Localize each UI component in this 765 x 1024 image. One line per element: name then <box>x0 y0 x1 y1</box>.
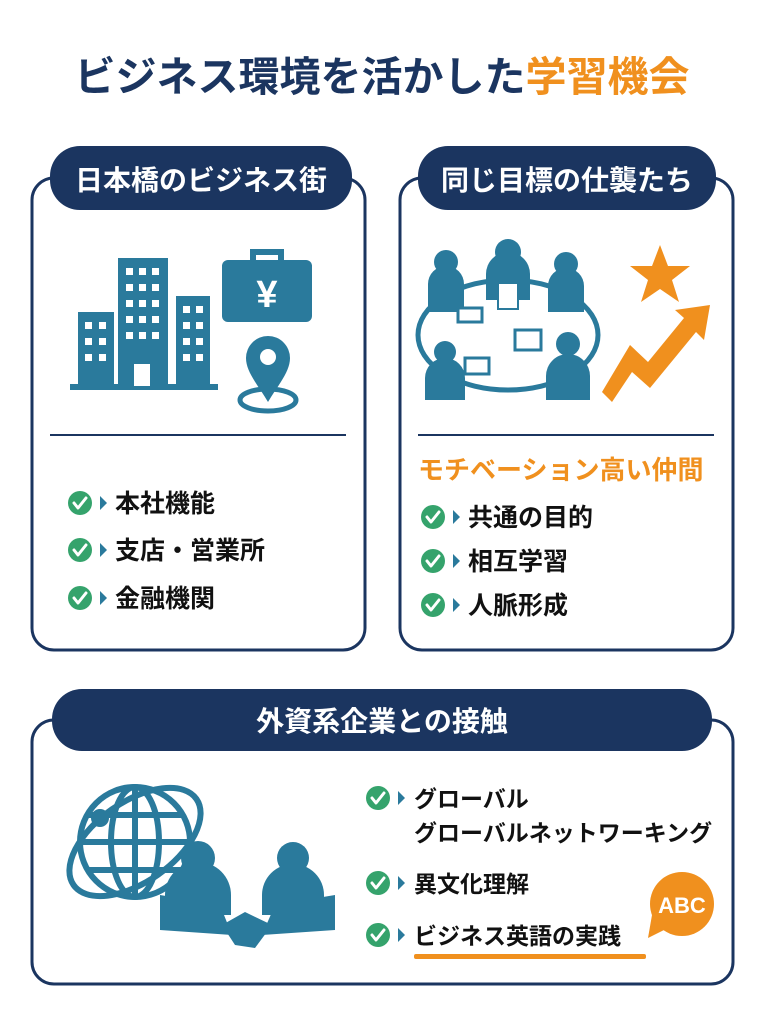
icon: buildings <box>70 258 218 390</box>
icon: map pin <box>240 336 296 411</box>
heading: 同じ目標の仕襲たち <box>418 146 716 210</box>
panel: foreign companies <box>32 689 733 984</box>
list: business items: 本社機能 <box>115 490 215 518</box>
icon: star <box>630 245 690 302</box>
list: peer items: 人脈形成 <box>468 592 568 620</box>
list: foreign items: ビジネス英語の実践 <box>414 923 621 949</box>
icon: globe with business people <box>51 766 335 948</box>
heading: 外資系企業との接触 <box>52 689 712 751</box>
underline <box>414 954 646 959</box>
list: business items: 支店・営業所 <box>115 537 265 565</box>
icon: briefcase yen <box>222 252 312 322</box>
list: business items: 金融機関 <box>115 585 215 613</box>
icon: briefcase yen: ¥ <box>256 274 278 316</box>
list: business items <box>68 490 265 613</box>
list: peer items <box>421 504 593 620</box>
list: peer items: 相互学習 <box>468 548 568 576</box>
icon: ABC speech bubble: ABC <box>658 893 706 918</box>
title: ビジネス環境を活かした学習機会 <box>74 54 690 100</box>
icon: ABC speech bubble <box>648 872 714 938</box>
icon: rising arrow <box>602 305 710 402</box>
panel: business district <box>32 146 365 650</box>
list: foreign items <box>366 786 712 949</box>
list: peer items: 共通の目的 <box>468 504 593 532</box>
heading: 外資系企業との接触: 外資系企業との接触 <box>256 706 508 737</box>
panel: peers <box>400 146 733 650</box>
icon: meeting people <box>418 239 598 400</box>
heading: 同じ目標の仕襲たち: 同じ目標の仕襲たち <box>441 165 693 196</box>
list: foreign items: グローバルネットワーキング <box>414 820 712 846</box>
list: foreign items: 異文化理解 <box>414 871 529 897</box>
heading: 日本橋のビジネス街: 日本橋のビジネス街 <box>75 165 327 196</box>
heading: 日本橋のビジネス街 <box>50 146 352 210</box>
subheading: motivation: モチベーション高い仲間 <box>418 455 703 485</box>
list: foreign items: グローバル <box>414 786 529 812</box>
